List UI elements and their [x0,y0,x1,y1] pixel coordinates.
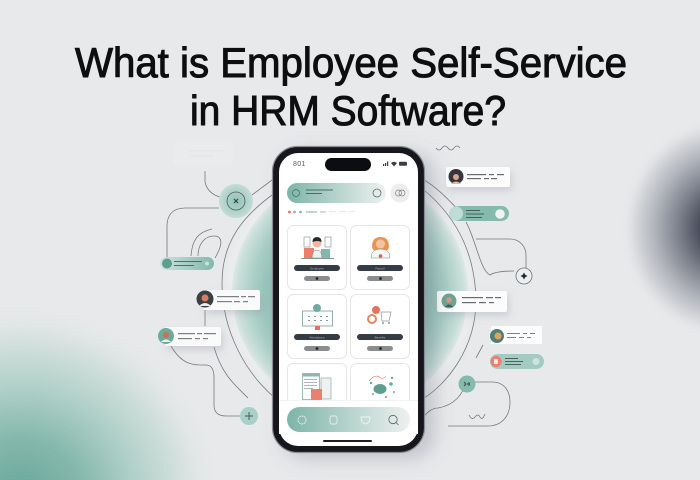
card: payroll [350,226,410,290]
node: right plus circle [516,268,532,284]
connector lines [167,146,526,426]
bottom navigation [279,400,418,434]
card: employee: Employee [310,266,324,270]
home indicator [323,440,372,442]
card: payroll: Payroll [375,266,385,270]
chat button [390,184,410,202]
node: right teal pill with red icon [490,354,544,369]
status bar time: 801 [293,161,306,168]
node: bottom-left plus [240,407,258,425]
node: top-left faded card [173,143,233,165]
title: in HRM Software? [190,87,506,134]
node: right teal toggle [449,206,509,221]
card: attendance: Attendance [309,336,325,340]
status icons [383,162,407,166]
card: benefits: Benefits [375,336,386,340]
phone screen [279,153,418,446]
card: right top person [446,167,510,187]
title [75,39,627,134]
phone [272,146,424,452]
card: documents [287,363,347,400]
title: What is Employee Self-Service [75,39,627,86]
card: right lower person [490,326,542,344]
search bar [287,183,386,203]
card: employee [288,226,346,290]
card: left person 1 [196,290,260,310]
filter dots [288,211,355,213]
node: teal J circle [458,376,476,392]
large teal circle backdrop [226,168,474,416]
card: team [350,363,410,400]
card: right middle person [437,291,507,312]
card: left person 2 [158,327,221,346]
node: left teal pill [160,257,214,270]
notch [325,158,371,171]
card: benefits [350,294,410,358]
card: attendance [288,294,346,358]
node: close circle [219,184,253,218]
